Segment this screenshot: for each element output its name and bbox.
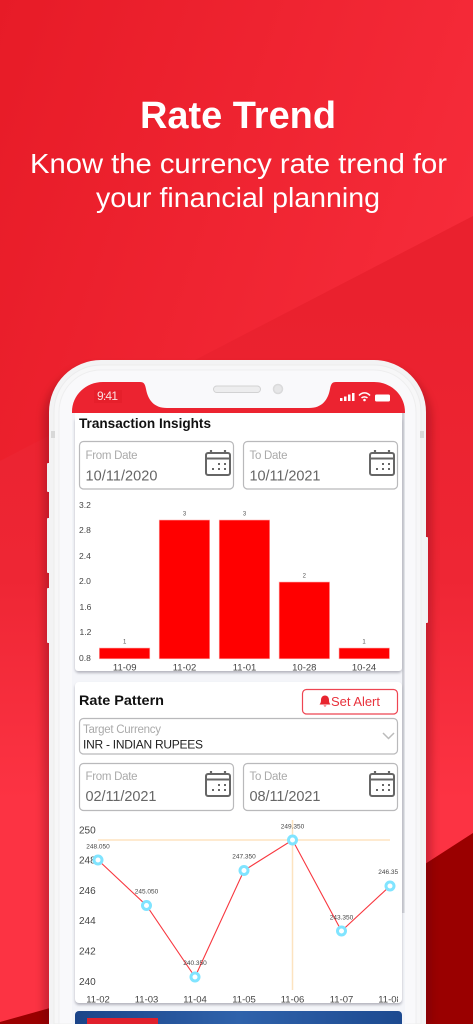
y axis labels: 2.4	[79, 551, 91, 561]
x axis labels: 10-28	[292, 662, 316, 674]
bars	[99, 520, 390, 659]
target currency field	[80, 718, 398, 754]
point value labels	[86, 824, 402, 967]
to date field: 08/11/2021	[250, 789, 320, 805]
y axis labels: 3.2	[79, 500, 91, 510]
x axis labels: 11-07	[330, 994, 353, 1006]
phone body	[49, 360, 426, 1024]
point value labels: 247.350	[232, 854, 256, 860]
rate line	[98, 840, 390, 977]
y axis labels: 248	[79, 856, 96, 866]
screen background	[72, 413, 405, 1024]
from date field	[80, 442, 234, 489]
y axis labels	[79, 826, 96, 988]
card heading: Transaction Insights	[79, 415, 211, 431]
heading: Rate Trend: Rate Trend	[140, 95, 336, 137]
target currency field: Target Currency	[83, 724, 161, 736]
card heading: Rate Pattern	[79, 692, 164, 708]
x axis labels	[113, 662, 376, 674]
x axis labels: 11-03	[135, 994, 158, 1006]
point value labels: 240.350	[183, 960, 207, 967]
phone side buttons	[47, 463, 428, 643]
x axis labels: 11-02	[86, 994, 110, 1006]
bar value labels: 2	[303, 574, 307, 580]
from date field: From Date	[86, 771, 138, 783]
icon: calendar	[370, 450, 394, 475]
bar value labels: 3	[243, 512, 247, 518]
bar chart	[79, 500, 390, 674]
icon: chevron	[383, 733, 394, 738]
bar value labels: 3	[183, 512, 187, 518]
x axis labels: 11-04	[183, 994, 207, 1006]
subtitle text	[30, 148, 447, 213]
bar value labels	[123, 512, 366, 646]
icon: calendar	[206, 771, 230, 796]
from date field: 02/11/2021	[86, 789, 156, 805]
panel: rate pattern	[75, 682, 402, 1006]
point value labels: 243.350	[330, 914, 354, 922]
icon: calendar	[370, 771, 394, 796]
from date field: From Date	[86, 450, 138, 462]
data points	[94, 836, 394, 981]
target currency field: INR - INDIAN RUPEES	[83, 738, 203, 752]
banner red label	[87, 1018, 158, 1024]
point value labels: 249.350	[281, 824, 305, 830]
crosshair	[98, 820, 390, 990]
y axis labels: 244	[79, 916, 96, 927]
from date field	[80, 764, 234, 810]
subtitle text: Know the currency rate trend for	[30, 148, 447, 179]
status time: 9:41	[97, 389, 118, 403]
x axis labels: 11-08	[378, 994, 402, 1006]
from date field: 10/11/2020	[86, 468, 158, 484]
bar value labels: 1	[362, 640, 366, 646]
to date field	[244, 764, 398, 810]
status icons	[340, 393, 390, 402]
point value labels: 245.050	[135, 888, 159, 896]
y axis labels: 2.8	[79, 525, 91, 535]
x axis labels	[86, 996, 398, 1002]
x axis labels: 11-02	[173, 662, 196, 674]
set alert button	[302, 690, 398, 714]
x axis labels: 11-01	[233, 662, 256, 674]
line chart	[79, 820, 402, 1006]
icon: calendar	[206, 450, 230, 475]
to date field	[244, 442, 398, 489]
y axis labels: 240	[79, 977, 96, 988]
y axis labels	[79, 500, 92, 663]
point value labels: 248.050	[86, 844, 110, 850]
scrollbar	[402, 413, 404, 913]
to date field: To Date	[250, 771, 288, 783]
promo banner	[75, 1011, 402, 1024]
status bar	[72, 382, 405, 413]
y axis labels: 1.2	[80, 627, 92, 637]
y axis labels: 246	[79, 886, 96, 897]
bar value labels: 1	[123, 640, 127, 646]
point value labels: 246.350	[378, 869, 402, 876]
speaker	[214, 386, 260, 392]
x axis labels: 11-06	[281, 994, 304, 1006]
y axis labels: 250	[79, 826, 96, 836]
phone mockup	[43, 360, 432, 1024]
subtitle text: your financial planning	[96, 182, 380, 213]
y axis labels: 2.0	[79, 576, 91, 586]
to date field: To Date	[250, 450, 288, 462]
icon: bell	[320, 696, 330, 707]
set alert button: Set Alert	[331, 694, 380, 709]
panel: transaction insights	[75, 413, 402, 674]
to date field: 10/11/2021	[250, 468, 320, 484]
y axis labels: 1.6	[80, 602, 92, 612]
y axis labels: 0.8	[79, 653, 91, 663]
x axis labels: 10-24	[352, 662, 376, 674]
y axis labels: 242	[79, 946, 96, 958]
camera	[274, 384, 282, 394]
x axis labels: 11-05	[232, 994, 256, 1006]
x axis labels: 11-09	[113, 662, 136, 674]
